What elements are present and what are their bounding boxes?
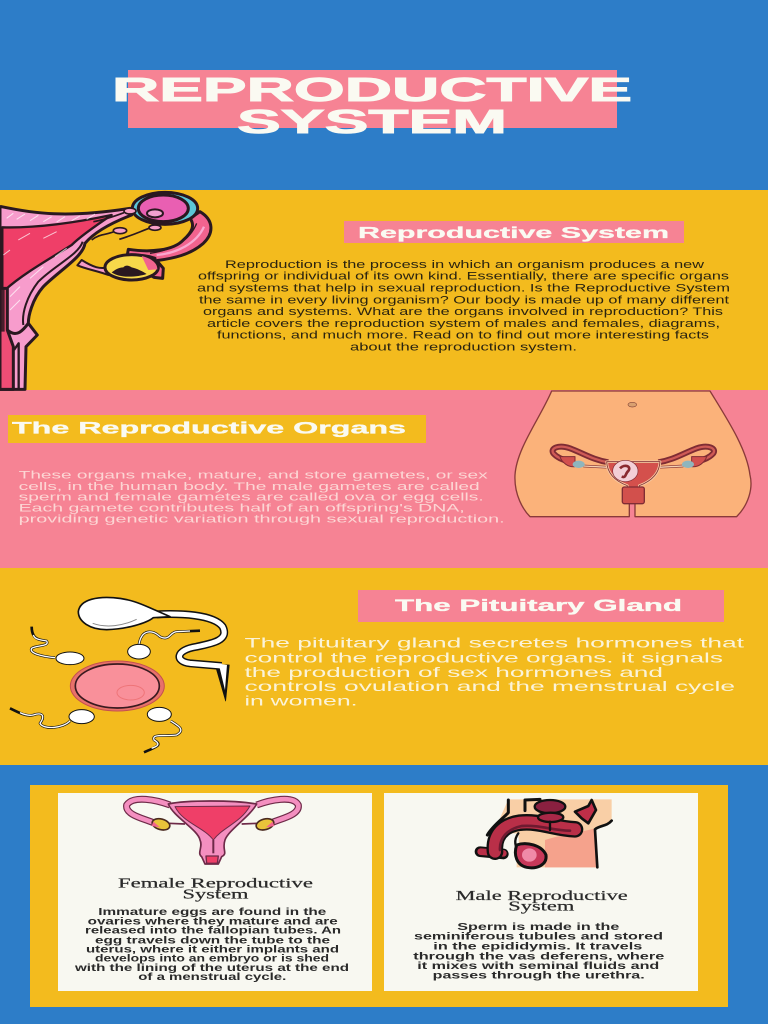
heading: Male Reproductive System: Male Reproductive xyxy=(456,888,628,903)
title xyxy=(112,70,632,141)
panel: organ cards xyxy=(30,785,728,1007)
text block: pituitary: control the reproductive organs. it signals xyxy=(244,649,723,665)
text block: intro: and systems that help in sexual reproduction. Is the Reproductive System xyxy=(197,282,730,294)
title: REPRODUCTIVE xyxy=(112,72,632,109)
text block: organs xyxy=(19,470,505,526)
title: SYSTEM xyxy=(237,104,507,141)
text block: female: ovaries where they mature and are xyxy=(88,916,338,927)
text block: female: egg travels down the tube to the xyxy=(95,935,331,946)
heading: Female Reproductive System: System xyxy=(182,886,249,901)
icon: male anatomy xyxy=(480,799,612,868)
illustration: female reproductive cross-section xyxy=(0,192,211,389)
heading: Female Reproductive System: Female Reproductive xyxy=(118,875,313,890)
text block: organs: Each gamete contributes half of an offspring's DNA, xyxy=(19,503,465,515)
text block: female: uterus, where it either implants and xyxy=(86,945,339,956)
icon: uterus xyxy=(127,799,298,864)
text block: intro xyxy=(197,259,730,354)
text block: female: Immature eggs are found in the xyxy=(98,907,327,918)
text block: pituitary: the production of sex hormones and xyxy=(244,664,663,680)
heading: Male Reproductive System: System xyxy=(508,899,575,914)
heading: Male Reproductive System xyxy=(456,888,628,914)
text block: male: in the epididymis. It travels xyxy=(433,941,643,952)
heading: The Reproductive Organs xyxy=(8,415,426,443)
text block: male: it mixes with seminal fluids and xyxy=(417,961,659,972)
text block: organs: cells, in the human body. The male gametes are called xyxy=(19,481,480,493)
text block: organs: providing genetic variation through sexual reproduction. xyxy=(19,514,505,526)
heading: Reproductive System xyxy=(344,221,684,243)
card: female xyxy=(58,793,372,991)
text block: male: passes through the urethra. xyxy=(433,971,645,982)
illustration: abdomen with uterus xyxy=(515,391,751,517)
text block: female: develops into an embryo or is shed xyxy=(95,954,329,965)
text block: pituitary: The pituitary gland secretes hormones that xyxy=(244,635,744,651)
text block: female: with the lining of the uterus at the end xyxy=(73,963,349,974)
text block: organs: These organs make, mature, and store gametes, or sex xyxy=(19,470,489,482)
illustration: sperm and egg xyxy=(10,597,229,752)
text block: female xyxy=(73,907,349,983)
text block: female: released into the fallopian tubes. An xyxy=(85,926,341,937)
text block: male: Sperm is made in the xyxy=(457,922,620,933)
heading: Reproductive System: Reproductive System xyxy=(358,225,669,242)
text block: pituitary: in women. xyxy=(244,692,358,708)
text block: organs: sperm and female gametes are called ova or egg cells. xyxy=(19,492,484,504)
text block: intro: Reproduction is the process in which an organism produces a new xyxy=(225,259,704,271)
card: male xyxy=(384,793,698,991)
text block: pituitary: controls ovulation and the menstrual cycle xyxy=(244,678,735,694)
text block: male: through the vas deferens, where xyxy=(413,951,665,962)
text block: intro: the same in every living organism? Our body is made up of many different xyxy=(199,294,729,306)
heading: The Pituitary Gland xyxy=(358,590,724,622)
heading: The Reproductive Organs: The Reproductive Organs xyxy=(12,418,406,438)
text block: intro: article covers the reproduction system of males and females, diagrams, xyxy=(207,318,720,330)
text block: intro: functions, and much more. Read on to find out more interesting facts xyxy=(217,330,710,342)
text block: intro: organs and systems. What are the organs involved in reproduction? This xyxy=(203,306,724,318)
text block: male: seminiferous tubules and stored xyxy=(414,932,663,943)
text block: male xyxy=(413,922,665,982)
text block: intro: offspring or individual of its own kind. Essentially, there are specific organs xyxy=(198,271,730,283)
text block: pituitary xyxy=(244,635,744,708)
heading: The Pituitary Gland: The Pituitary Gland xyxy=(395,597,682,615)
text block: female: of a menstrual cycle. xyxy=(138,972,287,983)
text block: intro: about the reproduction system. xyxy=(350,342,577,354)
heading: Female Reproductive System xyxy=(118,875,313,901)
